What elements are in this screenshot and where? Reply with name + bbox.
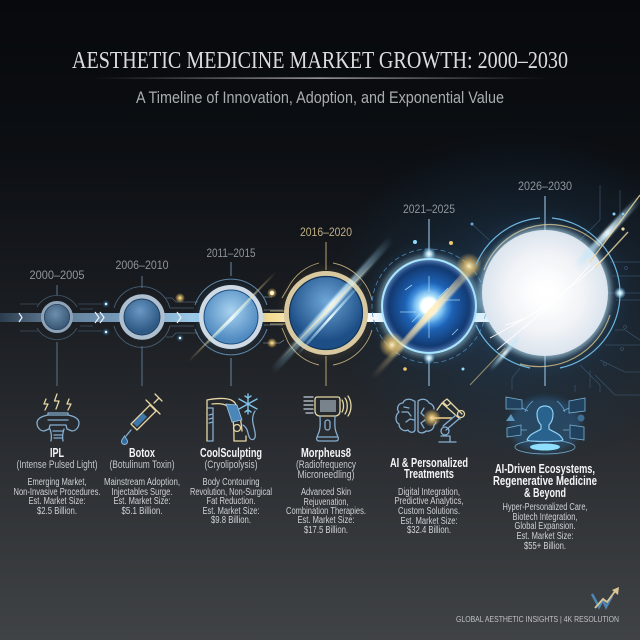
text: AI & Personalized Treatments: Digital Integration, (398, 487, 460, 498)
text: IPL: (Intense Pulsed Light) (16, 459, 98, 471)
text: AI & Personalized Treatments: $32.4 Billion. (407, 525, 451, 536)
timeline bar (0, 311, 500, 324)
text: AI & Personalized Treatments: Custom Solutions. (398, 506, 460, 517)
text: AI & Personalized Treatments: AI & Personalized (390, 456, 468, 470)
icon: CoolSculpting machine with snowflake (207, 394, 257, 441)
text: AI-Driven Ecosystems: Global Expansion. (514, 521, 576, 532)
text: AI-Driven Ecosystems: Regenerative Medicine (493, 474, 597, 488)
icon: AI brain and robot arm (396, 399, 464, 442)
milestone 2: 2006–2010 (114, 258, 198, 386)
text: CoolSculpting: Fat Reduction. (206, 496, 256, 507)
text: Morpheus8: (Radiofrequency (296, 459, 356, 471)
text: AI & Personalized Treatments: Est. Market Size: (400, 516, 458, 527)
year label: 2000–2005 (30, 268, 85, 282)
text: IPL: IPL (50, 446, 64, 460)
text: IPL: Non-Invasive Procedures. (14, 487, 100, 498)
icon: Morpheus8 handpiece (304, 396, 351, 441)
text: Botox: Injectables Surge. (112, 487, 172, 498)
text: AI-Driven Ecosystems: $55+ Billion. (524, 541, 566, 552)
text: Morpheus8: Est. Market Size: (298, 515, 354, 526)
text: Morpheus8: Combination Therapies. (286, 506, 366, 517)
icon: IPL handpiece with bolts (37, 394, 79, 441)
text: AI-Driven Ecosystems: Hyper-Personalized Care, (502, 502, 588, 513)
text: IPL (14, 446, 100, 517)
text: AI-Driven Ecosystems: AI-Driven Ecosystems, (495, 462, 595, 476)
text: AI & Personalized Treatments: Predictive Analytics, (394, 496, 464, 507)
text: AI-Driven Ecosystems (493, 462, 597, 552)
text: AI & Personalized Treatments: Treatments (404, 467, 454, 481)
text: Morpheus8: Morpheus8 (301, 446, 351, 460)
text: CoolSculpting: CoolSculpting (200, 446, 262, 460)
text: Botox: (Botulinum Toxin) (110, 459, 174, 471)
text: CoolSculpting: $9.8 Billion. (211, 515, 251, 526)
text: Botox: Est. Market Size: (114, 496, 170, 507)
title divider (90, 78, 550, 79)
text: Morpheus8 (286, 446, 366, 536)
text: Botox: Botox (129, 446, 155, 460)
text: Morpheus8: Rejuvenation, (304, 497, 348, 508)
year label: 2021–2025 (403, 202, 455, 216)
text: Morpheus8: $17.5 Billion. (304, 525, 348, 536)
icon: logo (592, 587, 619, 608)
milestone 6: 2026–2030 (459, 179, 640, 386)
text: Morpheus8: Microneedling) (298, 469, 354, 481)
text: IPL: Est. Market Size: (28, 496, 86, 507)
text: CoolSculpting: Est. Market Size: (202, 506, 260, 517)
year label: 2006–2010 (116, 258, 169, 272)
text: AI-Driven Ecosystems: Biotech Integration, (512, 512, 578, 523)
blue ambient glow (320, 130, 640, 470)
text: AI & Personalized Treatments (390, 456, 468, 536)
text: Botox: Mainstream Adoption, (104, 477, 180, 488)
text: Morpheus8: Advanced Skin (301, 487, 351, 498)
text: CoolSculpting: Body Contouring (202, 477, 260, 488)
text: Botox (104, 446, 180, 517)
text: IPL: $2.5 Billion. (37, 506, 77, 517)
milestone 4: 2016–2020 (270, 225, 392, 386)
text: AI-Driven Ecosystems: Est. Market Size: (516, 531, 574, 542)
year label: 2011–2015 (206, 246, 256, 260)
circuit traces (472, 185, 640, 395)
year label: 2026–2030 (518, 179, 572, 193)
text: CoolSculpting (190, 446, 272, 526)
text: IPL: Emerging Market, (28, 477, 86, 488)
icon: AI hologram person (506, 397, 585, 454)
text: CoolSculpting: Revolution, Non-Surgical (190, 487, 272, 498)
milestone 1: 2000–2005 (20, 268, 110, 386)
text: CoolSculpting: (Cryolipolysis) (204, 459, 258, 471)
icon: Botox syringe (122, 394, 162, 444)
year label: 2016–2020 (300, 225, 352, 239)
milestone 5: 2021–2025 (363, 202, 495, 386)
text: AI-Driven Ecosystems: & Beyond (524, 486, 566, 500)
text: Botox: $5.1 Billion. (122, 506, 162, 517)
milestone 3: 2011–2015 (188, 246, 284, 386)
subtitle: A Timeline of Innovation, Adoption, and Exponential Value (136, 89, 504, 107)
